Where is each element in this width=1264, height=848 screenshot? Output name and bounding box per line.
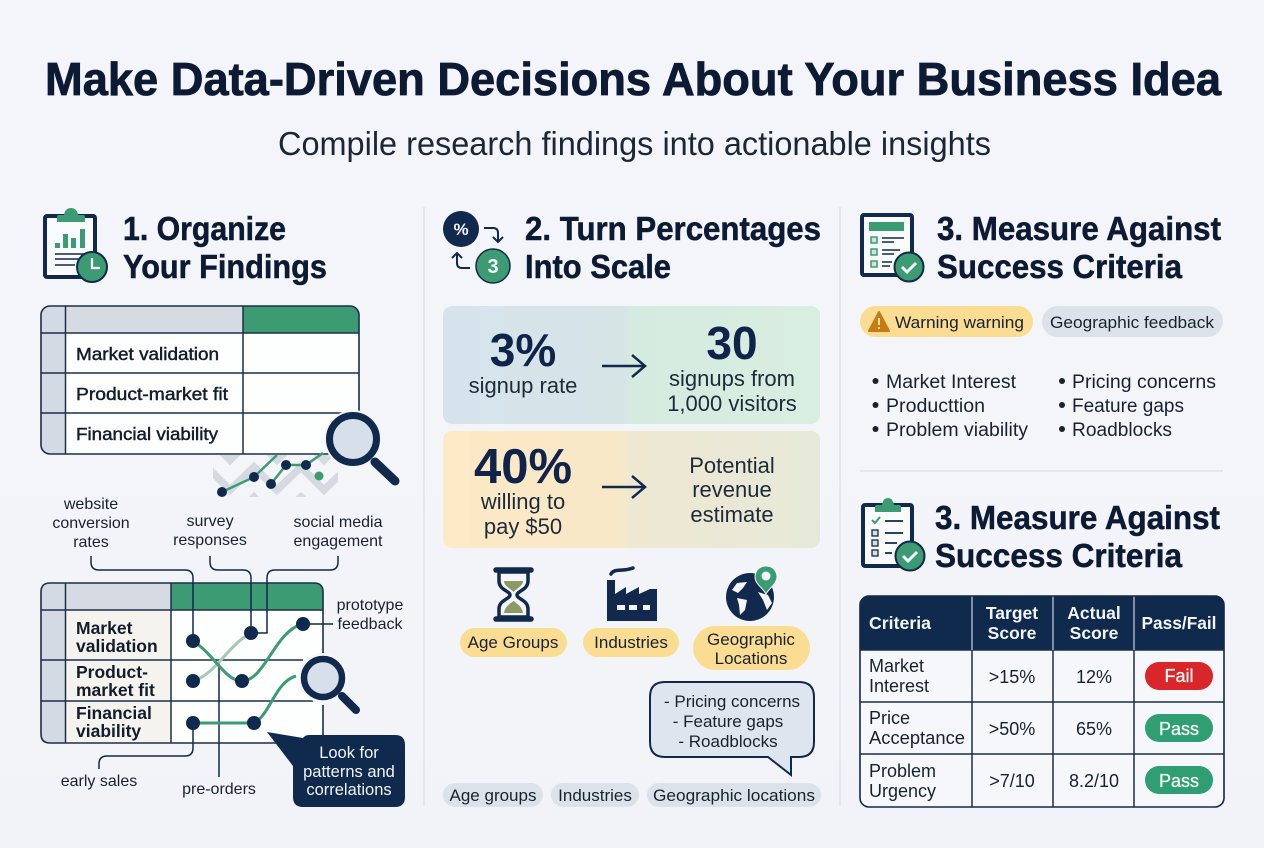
panel: signup rate conversion [443,306,820,424]
pill: industries [583,628,679,657]
row: problem urgency: 8.2/10 [1069,771,1119,791]
row: problem urgency: Problem [869,761,936,781]
bullet list: feedback [1059,372,1216,441]
table header: Pass/Fail [1142,613,1216,633]
pill: geographic feedback: Geographic feedback [1050,313,1215,332]
pill: age groups tag: Age groups [450,786,536,805]
row: price acceptance: Pass [1159,719,1199,739]
icon: percent to number cycle: % [453,220,469,239]
correlation trend lines [186,617,310,730]
scorecard table [860,596,1224,807]
data source labels [52,496,403,798]
data source labels: conversion [52,515,130,532]
table header: Score [988,623,1037,643]
icon: percent to number cycle [443,211,510,283]
arrow [602,355,645,377]
heading: 1. Organize Your Findings: 1. Organize [123,210,286,247]
table header: Score [1070,623,1119,643]
row: price acceptance: Price [869,708,910,728]
title: Make Data-Driven Decisions About Your Business Idea [45,53,1221,105]
heading: 2. Turn Percentages Into Scale: Into Scale [525,248,671,285]
data source labels: feedback [338,616,403,633]
icon: magnifying glass [324,410,395,481]
speech bubble: concerns: - Pricing concerns [664,692,800,711]
panel: measure against criteria, scorecard [860,498,1224,807]
data source labels: rates [73,534,109,551]
upper findings table [41,306,359,454]
row: problem urgency [869,761,1213,801]
lower correlation table: validation [76,636,158,656]
callout: look for patterns: correlations [306,781,392,799]
callout: look for patterns [267,732,405,807]
panel: signup rate conversion: signup rate [469,373,577,398]
panel: signup rate conversion: 3% [490,324,556,376]
row: problem urgency: Pass [1159,771,1199,791]
data source labels: early sales [61,773,137,790]
pill: geographic feedback [1042,306,1223,337]
table header: Target [986,603,1038,623]
row: market interest: Market [869,656,924,676]
icon: magnifying glass small [298,653,356,710]
panel: measure against criteria, feedback [860,210,1223,441]
heading: 3. Measure Against Success Criteria [937,210,1221,285]
pill: warning: Warning warning [895,313,1024,332]
heading: 1. Organize Your Findings [123,210,327,285]
panel: revenue estimate: estimate [690,502,774,527]
panel: signup rate conversion: 1,000 visitors [667,391,797,416]
pill: geographic locations [693,626,810,670]
icon: factory [607,568,657,621]
bullet list: criteria: Market Interest [886,372,1017,393]
heading: 3. Measure Against Success Criteria: 3. Measure Against [935,499,1220,536]
data source labels: survey [186,513,234,530]
lower correlation table: Financial [76,703,152,723]
bullet list: criteria: Problem viability [886,420,1029,441]
heading: 3. Measure Against Success Criteria: Success Criteria [935,537,1183,574]
panel: revenue estimate: willing to [480,489,565,514]
lower correlation table: market fit [76,680,155,700]
icon: checklist document [862,215,924,282]
upper findings table: Financial viability [76,424,218,444]
pill: geographic locations tag: Geographic locations [653,786,815,805]
panel: signup rate conversion: signups from [669,366,795,391]
row: market interest: Fail [1164,666,1194,686]
pill: warning [860,306,1033,337]
pill: industries: Industries [594,633,668,652]
callout: look for patterns: Look for [319,744,379,762]
icon: clipboard checklist [863,498,924,570]
row: problem urgency: Urgency [869,781,936,801]
subtitle: Compile research findings into actionable insights [278,125,991,162]
bullet list: criteria [872,372,1029,441]
lower correlation table: Market [76,618,133,638]
row: price acceptance: Acceptance [869,728,965,748]
callout: look for patterns: patterns and [303,763,395,781]
data source labels: engagement [294,533,383,550]
data source labels: prototype [337,597,403,614]
heading: 3. Measure Against Success Criteria: Success Criteria [937,248,1183,285]
heading: 1. Organize Your Findings: Your Findings [123,248,327,285]
speech bubble: concerns: - Feature gaps [673,712,783,731]
table header [869,603,1216,643]
row: price acceptance: 65% [1076,719,1112,739]
speech bubble: concerns: - Roadblocks [678,732,778,751]
bullet list: criteria: Producttion [886,396,985,417]
data source labels: website [63,496,118,513]
row: price acceptance [869,708,1213,748]
panel: revenue estimate: Potential [689,453,775,478]
pill: age groups tag [443,783,543,807]
lower correlation table: viability [76,721,141,741]
panel: revenue estimate [443,431,820,548]
bullet list: feedback: Roadblocks [1072,420,1172,441]
panel: organize findings [41,208,405,807]
row: market interest [869,656,1213,696]
icon: globe with pin [726,566,777,621]
row: market interest: 12% [1076,667,1112,687]
row: market interest: >15% [989,667,1035,687]
upper findings table: Product-market fit [76,384,228,404]
heading: 3. Measure Against Success Criteria: 3. Measure Against [937,210,1221,247]
icon: percent to number cycle: 3 [487,256,499,278]
pill: geographic locations: Geographic [707,630,795,649]
panel: percentages into scale [443,210,821,807]
heading: 3. Measure Against Success Criteria [935,499,1220,574]
pill: industries tag [551,783,639,807]
pill: geographic locations: Locations [715,649,787,668]
mini line chart over chevrons [213,452,338,497]
panel: revenue estimate: revenue [692,477,772,502]
table header: Criteria [869,613,931,633]
heading: 2. Turn Percentages Into Scale [525,210,821,285]
data source labels: pre-orders [182,781,256,798]
heading: 2. Turn Percentages Into Scale: 2. Turn Percentages [525,210,821,247]
data source labels: social media [294,514,383,531]
lower correlation table [41,583,323,743]
row: problem urgency: >7/10 [989,771,1035,791]
pill: age groups: Age Groups [468,633,558,652]
bullet list: feedback: Pricing concerns [1072,372,1216,393]
table header: Actual [1067,603,1121,623]
lower correlation table: Product- [76,662,148,682]
row: market interest: Interest [869,676,929,696]
pill: age groups [460,628,567,657]
connector lines [91,556,338,777]
pill: industries tag: Industries [558,786,632,805]
panel: signup rate conversion: 30 [706,317,758,369]
bullet list: feedback: Feature gaps [1072,396,1184,417]
row: price acceptance: >50% [989,719,1035,739]
icon: clipboard with chart and clock [45,208,107,282]
panel: revenue estimate: 40% [474,440,572,494]
panel: revenue estimate: pay $50 [484,514,562,539]
upper findings table: Market validation [76,344,219,364]
icon: hourglass [496,570,531,619]
speech bubble: concerns [650,682,814,775]
arrow [602,476,645,498]
data source labels: responses [173,532,247,549]
